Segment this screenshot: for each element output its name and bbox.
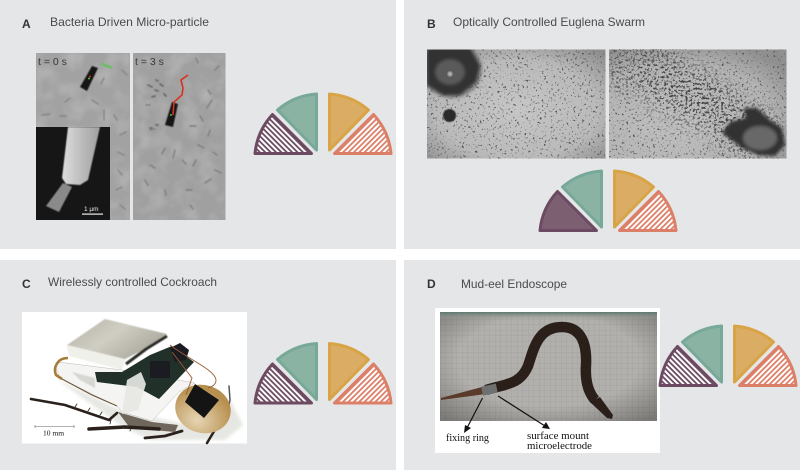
wing rim bbox=[55, 358, 68, 379]
chip blocks bbox=[150, 343, 189, 378]
black head cover bbox=[185, 384, 219, 418]
label D: D bbox=[427, 277, 436, 291]
scale bar bbox=[35, 425, 74, 428]
particle bbox=[80, 66, 98, 91]
arrow: microelectrode bbox=[498, 396, 550, 429]
tracking dot bbox=[170, 114, 172, 116]
wing grey detail bbox=[72, 372, 95, 388]
caption: fixing ring: fixing ring bbox=[446, 433, 489, 444]
caption: surface mount microelectrode: surface mount bbox=[527, 431, 589, 442]
panel: A bacteria driven micro-particle bbox=[0, 0, 396, 249]
eel head bbox=[590, 397, 613, 419]
semicircle rating icon D bbox=[660, 326, 796, 386]
green arrow bbox=[102, 64, 111, 68]
semicircle rating icon B bbox=[540, 171, 676, 230]
dark swarm ring bbox=[427, 50, 484, 100]
fixing ring on eel bbox=[481, 384, 498, 396]
heading C: Wirelessly controlled Cockroach bbox=[48, 275, 217, 289]
head shield bbox=[170, 379, 236, 439]
micrograph: t = 0 s bbox=[36, 53, 130, 220]
scale bar bbox=[82, 214, 103, 215]
micrograph: t = 3 s bbox=[133, 53, 226, 220]
caption: surface mount microelectrode: microelectrode bbox=[527, 441, 593, 452]
white strap bbox=[122, 372, 146, 414]
scale text: 1 µm bbox=[84, 206, 99, 213]
dark swarm bbox=[722, 108, 785, 156]
semicircle rating icon C bbox=[255, 344, 391, 403]
panel: D mud-eel endoscope bbox=[404, 260, 800, 470]
caption: surface mount microelectrode bbox=[527, 431, 593, 452]
micrograph: euglena right bbox=[609, 49, 787, 159]
inset: electron micrograph bbox=[36, 127, 110, 220]
wing lower rim bbox=[62, 379, 117, 406]
eel tail bbox=[441, 387, 486, 400]
semicircle rating icon A bbox=[255, 94, 391, 154]
photo: cockroach bbox=[22, 312, 247, 444]
heading A: Bacteria Driven Micro-particle bbox=[50, 15, 209, 29]
label C: C bbox=[22, 277, 31, 291]
time label: t = 3 s bbox=[135, 56, 164, 68]
label A: A bbox=[22, 17, 31, 31]
eel body bbox=[486, 327, 595, 400]
label B: B bbox=[427, 17, 436, 31]
time label: t = 0 s bbox=[38, 56, 67, 68]
heading B: Optically Controlled Euglena Swarm bbox=[453, 15, 645, 29]
heading D: Mud-eel Endoscope bbox=[461, 277, 567, 291]
dark swarm spot bbox=[443, 109, 456, 122]
photo: mud eel bbox=[435, 308, 660, 453]
panel: C wirelessly controlled cockroach bbox=[0, 260, 396, 470]
wing plate bbox=[56, 362, 195, 421]
legs bbox=[31, 386, 230, 443]
circuit board bbox=[95, 346, 194, 399]
shadow bbox=[55, 378, 243, 440]
red track bbox=[173, 75, 188, 115]
scale text: 10 mm bbox=[43, 428, 64, 438]
underbody bbox=[118, 412, 178, 432]
panel: B optically controlled euglena swarm bbox=[404, 0, 800, 249]
copper wires bbox=[170, 345, 216, 395]
particle bbox=[165, 102, 178, 127]
arrow: fixing ring bbox=[464, 398, 482, 433]
micrograph: euglena left bbox=[422, 42, 606, 158]
silver battery bbox=[67, 319, 167, 370]
tracking dots bbox=[88, 76, 91, 80]
